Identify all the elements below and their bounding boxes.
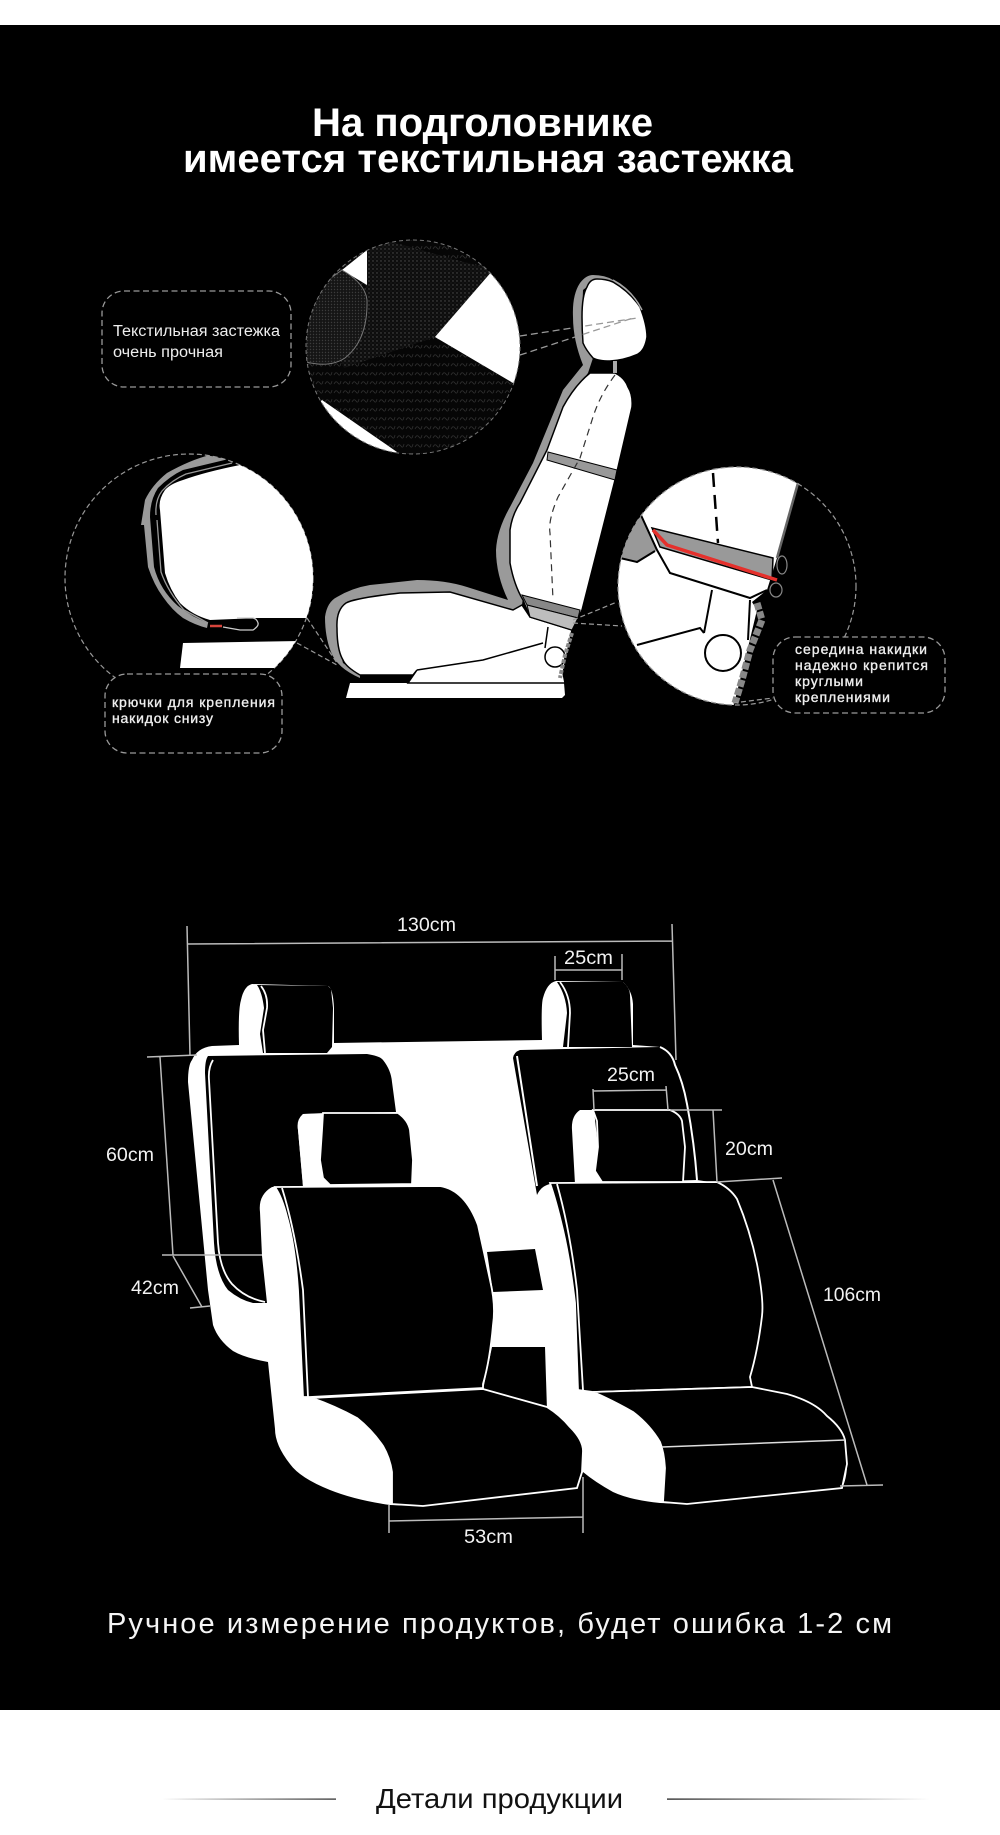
callout: round fasteners: середина накидки	[795, 641, 927, 657]
black outline of backrest base	[640, 513, 767, 598]
grey left bolster	[622, 516, 656, 561]
front-right cushion seam	[662, 1440, 845, 1447]
backrest centre dashed seam	[550, 375, 615, 600]
dashed lines from velcro circle to headrest	[520, 318, 637, 355]
front-left headrest pad	[320, 1113, 413, 1185]
red edge	[653, 530, 777, 580]
chain of fasteners	[735, 603, 762, 703]
white backing, bottom left	[320, 400, 397, 452]
backrest edge line	[777, 483, 798, 558]
leg outline	[637, 590, 750, 671]
velcro detail circle	[306, 240, 520, 454]
rear-right headrest pad	[557, 982, 632, 1047]
headrest	[582, 279, 647, 361]
seat base plate	[346, 683, 565, 698]
dimension labels: 106cm	[823, 1284, 881, 1306]
grey cover band	[141, 455, 233, 628]
grey cover band around the seat	[325, 275, 640, 678]
callout: velcro: Текстильная застежка	[113, 323, 280, 340]
grey strap	[652, 528, 773, 580]
white backing, top left	[342, 250, 367, 285]
inner stripe	[156, 463, 232, 623]
round fasteners	[770, 556, 787, 597]
callout: hooks: накидок снизу	[112, 710, 213, 726]
hook wire	[223, 618, 258, 630]
front-right headrest pad	[593, 1110, 685, 1182]
title: имеется текстильная застежка	[183, 137, 794, 181]
title: На подголовнике	[312, 101, 653, 145]
seat leg and pivot	[545, 627, 565, 667]
measurement note: Ручное измерение продуктов, будет ошибка 1-2 см	[107, 1608, 892, 1640]
rear-right backrest pad	[513, 1047, 697, 1195]
red hook tip	[210, 625, 222, 627]
backrest middle strap	[547, 452, 617, 480]
dimension labels: 130cm	[397, 914, 456, 936]
backrest lower straps	[522, 595, 580, 618]
dimension labels: 25cm	[564, 947, 613, 969]
dashed lines from right circle to seat	[573, 602, 773, 703]
dimension labels: 42cm	[131, 1277, 179, 1299]
dimension labels: 25cm	[607, 1064, 655, 1086]
callout: round fasteners: надежно крепится	[795, 657, 928, 673]
right detail circle	[600, 460, 856, 708]
callout: velcro: очень прочная	[113, 344, 223, 361]
rear-left backrest pad	[205, 1054, 396, 1303]
rear-left headrest pad	[257, 985, 333, 1053]
white seat silhouette	[188, 981, 847, 1506]
front-left backrest pad	[275, 1186, 494, 1397]
dashed ring	[65, 454, 313, 702]
front-right backrest pad	[550, 1182, 762, 1392]
black gaps between the rear bench and front seats	[483, 1249, 547, 1410]
dimension labels: 53cm	[464, 1526, 513, 1548]
velcro hook strip	[340, 242, 494, 367]
callout: round fasteners: креплениями	[795, 689, 890, 705]
seat backrest	[510, 373, 632, 630]
dimension labels: 60cm	[106, 1144, 154, 1166]
front-view seat set with dimensions	[106, 914, 883, 1548]
dimension labels	[106, 914, 881, 1548]
white seat section	[160, 465, 313, 620]
dashed seam	[713, 473, 718, 543]
folded flap	[300, 270, 367, 364]
white seat section	[618, 467, 797, 705]
cushion lower seam	[417, 643, 543, 670]
dashed lines from left circle to seat	[297, 618, 337, 665]
headrest post	[613, 361, 617, 373]
callout: hooks: крючки для крепления	[112, 694, 275, 710]
white backing, right	[435, 274, 520, 384]
dashed ring	[618, 467, 856, 705]
hook chain at seat rear	[560, 633, 572, 678]
velcro circle dashed ring	[306, 240, 520, 454]
white base plate	[180, 641, 300, 668]
front-right headrest white side	[572, 1110, 602, 1184]
front-right cushion pad	[593, 1387, 847, 1504]
seat cushion	[337, 592, 572, 683]
dimension lines	[147, 924, 883, 1533]
front-left headrest white side	[298, 1113, 328, 1187]
callout: hooks	[105, 674, 282, 753]
callout: velcro	[102, 291, 291, 387]
dimension labels: 20cm	[725, 1138, 773, 1160]
section heading: product details: Детали продукции	[376, 1783, 623, 1814]
title	[183, 101, 794, 181]
headrest edge highlight	[613, 280, 642, 310]
callout: round fasteners	[773, 637, 945, 713]
front-left cushion pad	[312, 1389, 583, 1506]
side-view seat illustration	[325, 275, 647, 698]
callout: round fasteners: круглыми	[795, 673, 863, 689]
left detail circle	[64, 453, 314, 678]
